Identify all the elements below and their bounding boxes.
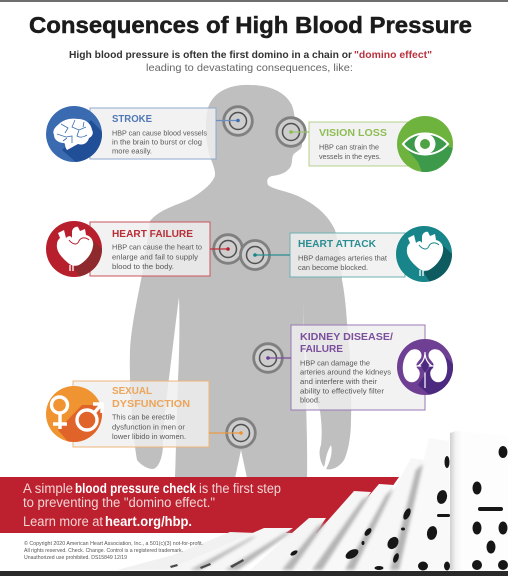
heart attack box (290, 233, 405, 277)
title: Consequences of High Blood Pressure (29, 12, 472, 38)
kidney text: HBP can damage the (300, 358, 370, 368)
sexual dysfunction heading: SEXUAL (112, 385, 153, 397)
icon: eye (397, 116, 453, 172)
panel: kidney disease (254, 325, 465, 410)
sexual dysfunction text (112, 412, 186, 441)
stroke text (112, 128, 207, 156)
icon: gender symbols (46, 386, 104, 442)
stroke text: HBP can cause blood vessels (112, 128, 207, 138)
intro text (69, 49, 432, 74)
stroke heading: STROKE (112, 113, 152, 125)
heart failure text (112, 242, 202, 271)
vision heading: VISION LOSS (319, 127, 387, 139)
vision text: HBP can strain the (319, 142, 379, 152)
icon: brain (46, 106, 102, 162)
panel: sexual dysfunction (46, 381, 255, 450)
heart attack connector (253, 253, 290, 257)
domino pips (290, 446, 508, 570)
heart attack heading: HEART ATTACK (298, 238, 376, 250)
kidney rings (254, 344, 282, 372)
sexual dysfunction box (73, 381, 209, 447)
stroke box (90, 108, 216, 159)
body silhouette (130, 85, 351, 478)
far dominoes (117, 532, 257, 570)
sexual dysfunction rings (227, 419, 255, 447)
kidney connector (266, 356, 291, 360)
call-to-action text (23, 481, 281, 529)
call-to-action text: A simple (23, 481, 73, 496)
heart failure text: enlarge and fail to supply (112, 252, 198, 262)
heart failure connector (210, 247, 230, 251)
call-to-action text: Learn more at (23, 514, 103, 529)
call-to-action text: heart.org/hbp. (105, 514, 192, 529)
copyright text: Unauthorized use prohibited. DS15849 12/19 (24, 555, 127, 561)
front domino (450, 431, 508, 570)
vision connector (289, 130, 309, 134)
heart failure text: HBP can cause the heart to (112, 242, 202, 252)
vision text: vessels in the eyes. (319, 152, 381, 161)
call-to-action text: blood pressure check (75, 481, 196, 496)
kidney text (300, 358, 391, 404)
icon: kidneys (397, 339, 453, 395)
stroke text: in the brain to burst or clog (112, 138, 202, 146)
intro text: High blood pressure is often the first domino in a chain or (69, 49, 352, 61)
sexual dysfunction heading (112, 385, 190, 410)
call-to-action text: is the first step (199, 481, 281, 496)
sexual dysfunction text: This can be erectile (112, 412, 175, 422)
sexual dysfunction text: lower libido in women. (112, 432, 186, 441)
stroke rings (224, 107, 252, 135)
stroke text: more easily. (112, 146, 152, 156)
vision box (309, 122, 425, 166)
falling dominoes (117, 431, 508, 570)
heart attack text: can become blocked. (298, 263, 368, 272)
bottom edge bar (0, 571, 508, 576)
heart attack text (298, 254, 388, 272)
domino shadows (190, 464, 423, 570)
kidney text: ability to effectively filter (300, 386, 384, 396)
kidney box (291, 325, 425, 410)
heart failure rings (214, 235, 242, 263)
panel: stroke (46, 105, 254, 162)
stroke connector (216, 119, 240, 122)
kidney text: arteries around the kidneys (300, 368, 391, 376)
intro text: "domino effect" (354, 49, 432, 61)
kidney text: and interfere with their (300, 377, 377, 386)
red call-to-action band (0, 477, 399, 533)
vision rings (277, 118, 305, 146)
vision text (319, 142, 381, 161)
kidney heading (300, 331, 393, 355)
copyright text: All rights reserved. Check. Change. Control is a registered trademark. (24, 548, 183, 554)
kidney heading: FAILURE (300, 343, 343, 355)
copyright text: © Copyright 2020 American Heart Association, Inc., a 501(c)(3) not-for-profit. (24, 540, 203, 547)
call-to-action text: to preventing the "domino effect." (23, 495, 215, 510)
kidney heading: KIDNEY DISEASE/ (300, 331, 393, 343)
intro text: leading to devastating consequences, like: (146, 62, 353, 74)
heart failure box (90, 222, 210, 276)
domino edge accents (170, 559, 244, 569)
panel: heart failure (46, 221, 243, 277)
heart attack rings (240, 240, 270, 270)
icon: blocked heart (396, 226, 452, 282)
copyright text (24, 540, 203, 561)
panel: heart attack (239, 226, 452, 282)
heart attack text: HBP damages arteries that (298, 254, 388, 262)
kidney text: blood. (300, 396, 320, 404)
heart failure text: blood to the body. (112, 262, 174, 271)
sexual dysfunction heading: DYSFUNCTION (112, 398, 190, 410)
panel: vision loss (275, 116, 453, 172)
sexual dysfunction connector (209, 431, 243, 435)
sexual dysfunction text: dysfunction in men or (112, 422, 185, 432)
heart failure heading: HEART FAILURE (112, 228, 193, 240)
icon: enlarged heart (46, 221, 102, 277)
